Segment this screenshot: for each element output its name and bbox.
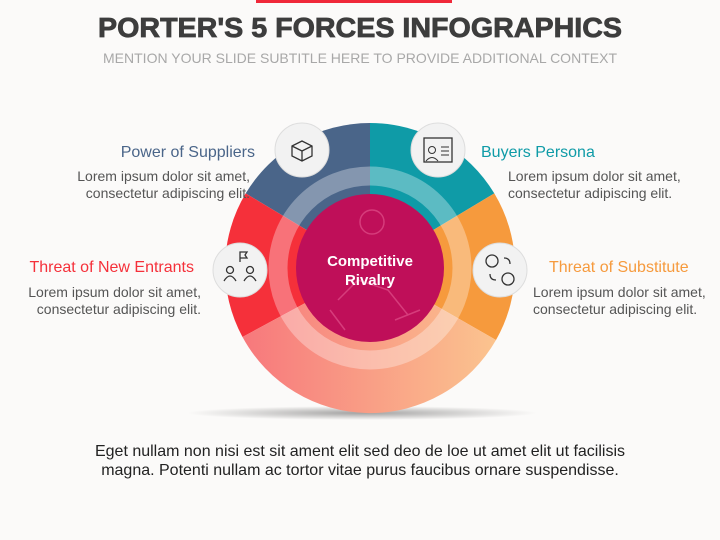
text: buyers: Buyers Persona <box>481 144 595 161</box>
icon: substitute <box>473 243 527 297</box>
text: new entrants: Threat of New Entrants <box>29 259 194 276</box>
bottom text: magna. Potenti nullam ac tortor vitae purus faucibus ornare suspendisse. <box>101 462 619 479</box>
text: substitute <box>533 259 706 317</box>
text: suppliers: Power of Suppliers <box>121 144 255 161</box>
pie diagram <box>225 123 515 413</box>
text: new entrants <box>28 259 201 317</box>
text: buyers <box>481 144 681 201</box>
text: buyers: consectetur adipiscing elit. <box>508 185 672 201</box>
text: substitute: Threat of Substitute <box>549 259 689 276</box>
text: substitute: Lorem ipsum dolor sit amet, <box>533 284 706 300</box>
text: suppliers <box>77 144 255 201</box>
bottom text: Eget nullam non nisi est sit ament elit sed deo de loe ut amet elit ut facilisis <box>95 443 625 460</box>
text: suppliers: consectetur adipiscing elit. <box>86 185 250 201</box>
text: suppliers: Lorem ipsum dolor sit amet, <box>77 168 250 184</box>
bottom text <box>95 443 625 479</box>
subtitle: MENTION YOUR SLIDE SUBTITLE HERE TO PROVIDE ADDITIONAL CONTEXT <box>103 50 617 66</box>
pie diagram: Rivalry <box>345 272 396 289</box>
title: PORTER'S 5 FORCES INFOGRAPHICS <box>98 12 622 43</box>
center circle <box>296 194 444 342</box>
shadow <box>187 406 537 420</box>
text: substitute: consectetur adipiscing elit. <box>533 301 697 317</box>
text: buyers: Lorem ipsum dolor sit amet, <box>508 168 681 184</box>
text: new entrants: Lorem ipsum dolor sit amet, <box>28 284 201 300</box>
icon: entrants <box>213 243 267 297</box>
pie diagram: Competitive <box>327 253 413 270</box>
icon: box <box>275 123 329 177</box>
icon: persona <box>411 123 465 177</box>
text: new entrants: consectetur adipiscing elit. <box>37 301 201 317</box>
